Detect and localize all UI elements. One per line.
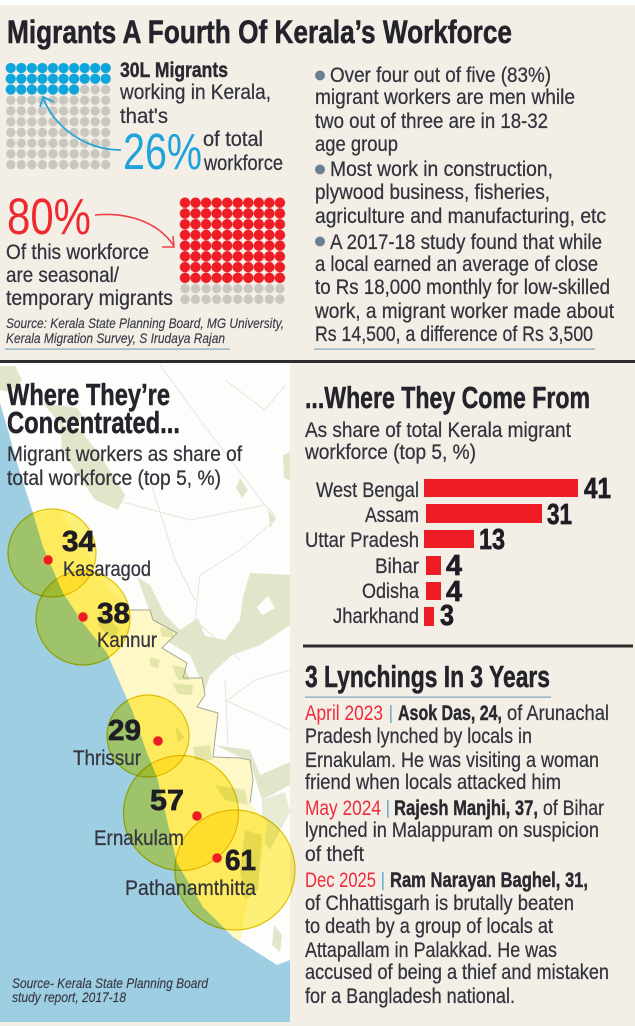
bar: Bihar: 4 xyxy=(446,550,462,582)
text: of total workforce: of total xyxy=(203,128,263,151)
waffle: red dots xyxy=(180,197,285,283)
map: district values and names: 34 xyxy=(62,526,95,558)
map: roads xyxy=(115,365,290,745)
bar: Bihar xyxy=(375,550,462,582)
case: May 2024 xyxy=(305,797,604,866)
subheading: bar chart: workforce (top 5, %) xyxy=(304,441,476,464)
map: district values and names: 38 xyxy=(97,598,130,630)
waffle: grey dots xyxy=(180,283,285,305)
bar: Odisha xyxy=(362,576,462,608)
map: Kerala hills xyxy=(98,610,262,900)
figure: 80 percent: 80% xyxy=(7,188,91,245)
map: district values and names: 61 xyxy=(225,845,256,877)
map: district values and names: Ernakulam xyxy=(94,827,184,850)
case: May 2024: of theft xyxy=(305,843,364,866)
map: Kerala state xyxy=(33,510,267,943)
case: April 2023: Pradesh lynched by locals in xyxy=(305,725,532,748)
bar: Jharkhand xyxy=(333,600,454,632)
bar: Uttar Pradesh: Uttar Pradesh xyxy=(305,529,419,552)
case: May 2024: Rajesh Manjhi, 37, xyxy=(394,797,538,820)
heading: 3 lynchings: 3 Lynchings In 3 Years xyxy=(305,659,550,694)
text block: key facts xyxy=(314,64,614,346)
map: district values and names: Kannur xyxy=(97,629,157,652)
bar: Odisha: Odisha xyxy=(362,580,419,603)
bar: Odisha: 4 xyxy=(446,576,462,608)
map: district values and names xyxy=(62,526,256,900)
source note: map: Source- Kerala State Planning Board xyxy=(12,975,209,991)
map: data circles xyxy=(8,509,295,930)
case: April 2023: April 2023 xyxy=(305,702,383,725)
case: Dec 2025: Attapallam in Palakkad. He was xyxy=(305,939,557,962)
text: seasonal migrants: Of this workforce xyxy=(6,241,149,264)
case: May 2024: lynched in Malappuram on suspicion xyxy=(305,819,599,842)
text: 30L migrants: that's xyxy=(120,105,168,128)
bullet xyxy=(315,164,325,174)
text: seasonal migrants: temporary migrants xyxy=(6,287,173,310)
circle: Kannur xyxy=(36,571,130,665)
text: 30L migrants xyxy=(119,59,271,128)
text block: key facts: age group xyxy=(315,133,398,156)
text block: key facts: plywood business, fisheries, xyxy=(315,181,550,204)
heading: where they're concentrated: Concentrated... xyxy=(7,405,180,440)
bar: West Bengal: 41 xyxy=(584,473,611,505)
arrow: blue xyxy=(40,97,121,150)
source note: top: Kerala Migration Survey, S Irudaya Rajan xyxy=(6,330,225,346)
subheading: bar chart xyxy=(304,419,571,464)
text block: key facts: migrant workers are men while xyxy=(315,86,575,109)
case: May 2024: May 2024 xyxy=(305,797,381,820)
case: Dec 2025 xyxy=(305,869,609,1008)
text: 30L migrants: working in Kerala, xyxy=(119,81,271,104)
heading: where they're concentrated xyxy=(7,377,180,440)
divider xyxy=(303,644,633,648)
circle: Kasaragod xyxy=(8,509,96,597)
text block: key facts: a local earned an average of close xyxy=(315,253,598,276)
waffle: grey dots xyxy=(6,63,111,170)
bullet xyxy=(315,70,325,80)
figure: 26 percent: 26% xyxy=(123,123,202,180)
text: of total workforce: workforce xyxy=(203,152,283,175)
circle: Pathanamthitta xyxy=(175,810,295,930)
bar: Jharkhand: 3 xyxy=(440,600,454,632)
map: district values and names: Kasaragod xyxy=(63,558,151,581)
text: 30L migrants: 30L Migrants xyxy=(120,59,228,82)
case: April 2023: of Arunachal xyxy=(507,702,609,725)
panel: 80 percent waffle chart xyxy=(6,188,285,310)
map: district markers xyxy=(43,555,222,863)
title: Migrants A Fourth Of Kerala’s Workforce xyxy=(7,14,512,50)
case: April 2023: friend when locals attacked him xyxy=(305,771,561,794)
map: district values and names: Thrissur xyxy=(73,747,141,770)
map: Kerala border xyxy=(130,610,253,803)
bullet xyxy=(315,236,325,246)
bar: Assam: Assam xyxy=(365,504,419,527)
text block: key facts: A 2017-18 study found that while xyxy=(330,231,602,254)
text: seasonal migrants: are seasonal/ xyxy=(6,264,119,287)
text block: key facts: Over four out of five (83%) xyxy=(330,64,551,87)
subheading: map: total workforce (top 5, %) xyxy=(7,467,221,490)
bar: Uttar Pradesh xyxy=(305,524,505,556)
case: Dec 2025: Dec 2025 xyxy=(305,869,376,892)
map: district values and names: 57 xyxy=(150,785,184,817)
case: April 2023: Asok Das, 24, xyxy=(398,702,502,725)
divider xyxy=(0,360,635,363)
case: Dec 2025: of Chhattisgarh is brutally beaten xyxy=(305,892,574,915)
map: district values and names: Pathanamthitta xyxy=(125,877,256,900)
bar: West Bengal: West Bengal xyxy=(316,479,419,502)
waffle: blue dots xyxy=(6,63,111,95)
bar: Assam: 31 xyxy=(547,499,572,531)
subheading: map: Migrant workers as share of xyxy=(7,443,242,466)
text block: key facts: two out of three are in 18-32 xyxy=(315,110,548,133)
source note: top: Source: Kerala State Planning Board, MG University, xyxy=(6,315,284,331)
bar: Assam xyxy=(365,499,572,531)
source note: top xyxy=(6,315,284,346)
bar: Bihar: Bihar xyxy=(375,555,419,578)
case: Dec 2025: Ram Narayan Baghel, 31, xyxy=(390,869,588,892)
bar chart: origin states xyxy=(305,473,611,632)
text block: key facts: Most work in construction, xyxy=(330,158,553,181)
case: Dec 2025: for a Bangladesh national. xyxy=(305,985,515,1008)
text block: lynching cases xyxy=(305,702,609,1008)
subheading: map xyxy=(7,443,242,490)
map sea xyxy=(0,403,290,1022)
arrow: red xyxy=(95,214,174,247)
subheading: bar chart: As share of total Kerala migrant xyxy=(305,419,571,442)
circle: Thrissur xyxy=(107,695,189,777)
bar: Jharkhand: Jharkhand xyxy=(333,605,419,628)
case: May 2024: of Bihar xyxy=(543,797,604,820)
text block: key facts: agriculture and manufacturing, etc xyxy=(315,205,606,228)
panel: 26 percent waffle chart xyxy=(6,59,283,180)
case: April 2023 xyxy=(305,702,609,794)
text: seasonal migrants xyxy=(6,241,173,310)
source note: map: study report, 2017-18 xyxy=(12,989,126,1005)
map: district values and names: 29 xyxy=(108,715,141,747)
panel: map xyxy=(0,363,295,1022)
bar: Uttar Pradesh: 13 xyxy=(479,524,505,556)
bar: West Bengal xyxy=(316,473,611,505)
map land xyxy=(0,363,290,1022)
heading: where they're concentrated: Where They’re xyxy=(7,377,170,412)
text block: key facts: work, a migrant worker made about xyxy=(314,300,614,323)
map: hill terrain xyxy=(0,366,290,952)
case: Dec 2025: to death by a group of locals at xyxy=(305,915,553,938)
source note: map xyxy=(12,975,209,1005)
text: of total workforce xyxy=(203,128,283,175)
circle: Ernakulam xyxy=(124,756,238,870)
